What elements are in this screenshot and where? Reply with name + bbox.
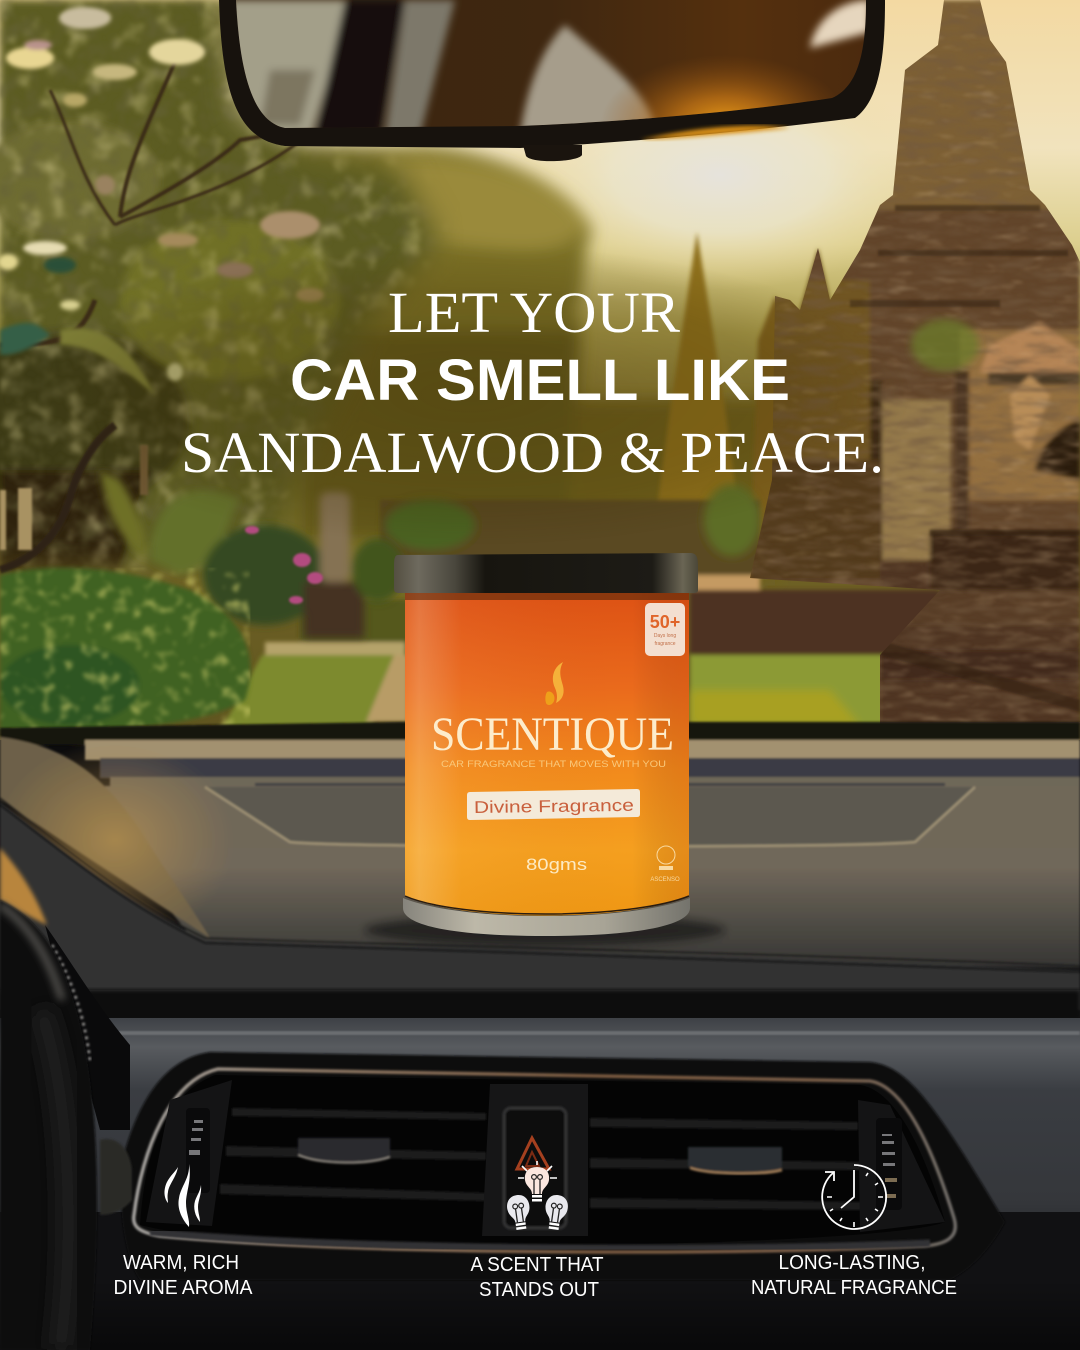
dashboard top	[0, 722, 1080, 1010]
rear-view mirror	[219, 0, 885, 195]
vent sliders	[298, 1138, 782, 1174]
maker logo	[650, 846, 680, 883]
feature: long-lasting, natural fragrance	[751, 1165, 957, 1299]
tin label body	[405, 590, 689, 916]
icon: aroma waves	[164, 1164, 201, 1227]
product: Scentique tin	[394, 553, 698, 936]
tin metal base	[403, 898, 690, 936]
icon: clock	[822, 1165, 886, 1229]
label: NATURAL FRAGRANCE	[751, 1277, 957, 1299]
label: LONG-LASTING,	[778, 1252, 926, 1274]
vent housing	[121, 1052, 1005, 1280]
maker logo: ASCENSO	[650, 877, 680, 883]
distant spires	[650, 232, 848, 560]
left flowering tree	[0, 0, 460, 580]
centre hazard button housing	[482, 1084, 588, 1236]
feature: warm, rich divine aroma	[114, 1164, 253, 1299]
pill: Divine Fragrance: Divine Fragrance	[474, 796, 634, 817]
badge: 50+: Days long	[654, 633, 676, 639]
grass and ground	[222, 484, 950, 728]
label: DIVINE AROMA	[114, 1277, 253, 1299]
mirror glass	[236, 0, 866, 128]
vent slats	[220, 1108, 866, 1210]
tin lid	[394, 553, 698, 593]
label	[751, 1252, 957, 1299]
tagline: CAR FRAGRANCE THAT MOVES WITH YOU	[441, 759, 666, 770]
headline: SANDALWOOD & PEACE.	[181, 420, 884, 485]
label	[114, 1252, 253, 1299]
feature: a scent that stands out	[470, 1138, 604, 1301]
darkened band behind headline	[30, 245, 910, 545]
brand name: SCENTIQUE	[431, 708, 674, 761]
main temple	[740, 0, 1080, 740]
badge: 50+	[645, 603, 685, 656]
blurred canopy behind text	[200, 147, 775, 600]
pill: Divine Fragrance	[467, 789, 640, 820]
label: WARM, RICH	[123, 1252, 239, 1274]
garden shrubs and shrine	[0, 470, 404, 732]
headline: LET YOUR	[388, 280, 680, 345]
mirror glow on frame	[640, 126, 790, 140]
headline: CAR SMELL LIKE	[290, 348, 790, 413]
label: A SCENT THAT	[470, 1254, 604, 1276]
icon: three light bulbs	[506, 1138, 569, 1231]
steering wheel and instrument cluster	[0, 848, 132, 1350]
badge: 50+: 50+	[650, 612, 680, 632]
lower console with air vents	[0, 990, 1080, 1350]
label: STANDS OUT	[479, 1279, 599, 1301]
vent side columns	[146, 1080, 232, 1226]
vent trim	[134, 1069, 955, 1252]
icon: flame logo	[545, 662, 564, 705]
badge: 50+: fragrance	[654, 641, 676, 647]
weight: 80gms	[526, 855, 587, 874]
headline	[181, 280, 884, 485]
label	[470, 1254, 604, 1301]
